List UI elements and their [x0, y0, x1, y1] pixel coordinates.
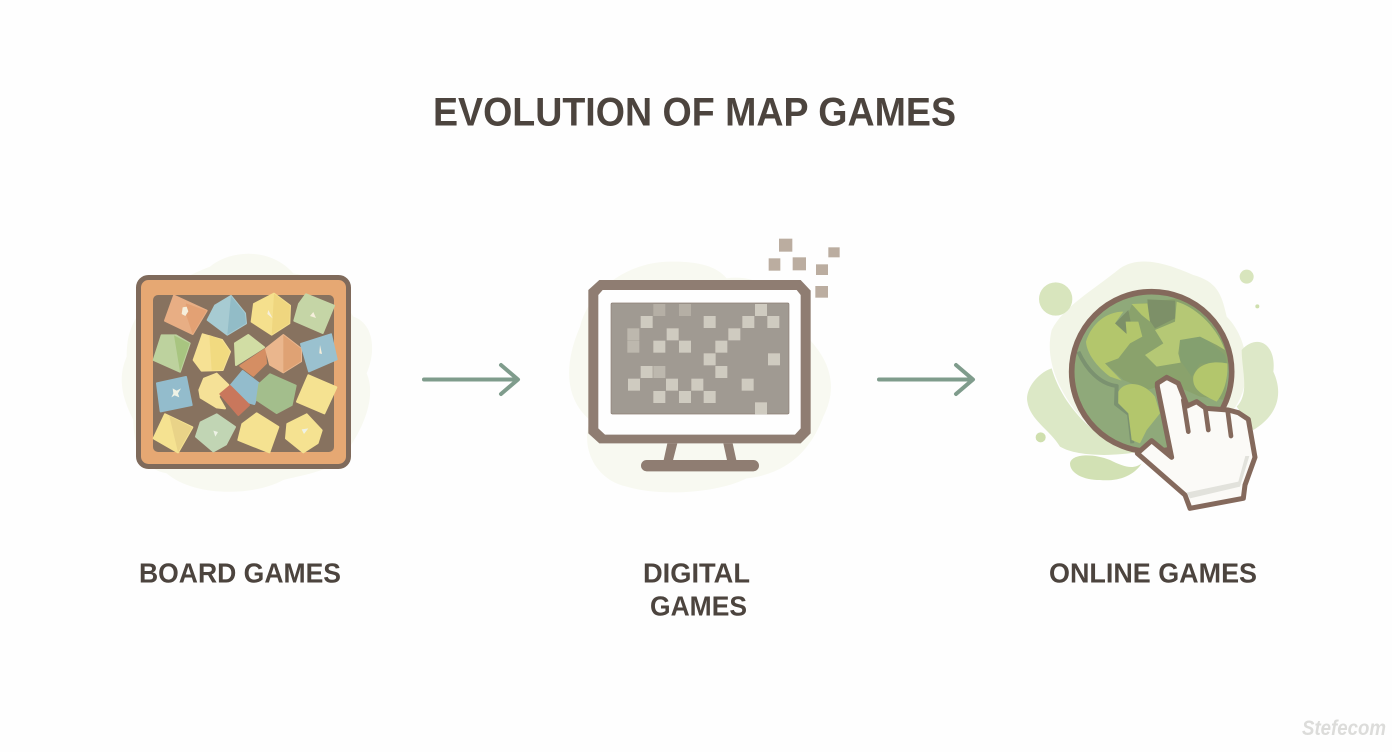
- africa: [1193, 362, 1227, 402]
- arrow: digital to online: [879, 365, 973, 394]
- label: digital games: [643, 558, 750, 622]
- monitor bezel: [598, 290, 801, 435]
- screen pixels: [627, 304, 780, 414]
- icon: online globe with hand: [1027, 262, 1278, 508]
- icon: digital monitor: [569, 239, 840, 492]
- greenland: [1132, 303, 1150, 322]
- tile marks: [182, 307, 322, 354]
- floating pixels: [769, 239, 840, 298]
- coast shadow: [1078, 352, 1132, 443]
- label: digital games: DIGITAL: [643, 558, 750, 588]
- monitor frame: [588, 280, 811, 443]
- ocean: [1072, 292, 1232, 452]
- board frame: [138, 278, 348, 466]
- title: EVOLUTION OF MAP GAMES: [433, 90, 956, 134]
- monitor stand: [641, 443, 759, 471]
- arrow: board to digital: [424, 365, 518, 394]
- eurasia: [1145, 302, 1225, 367]
- mid-tone land: [1105, 298, 1228, 400]
- top row tiles: [154, 294, 337, 376]
- globe: [1072, 292, 1232, 452]
- north america: [1086, 312, 1142, 381]
- dark north: [1147, 299, 1175, 328]
- screen: [611, 303, 789, 414]
- globe background blobs: [1027, 262, 1278, 480]
- icon: board game: [122, 254, 372, 492]
- south america: [1118, 384, 1160, 443]
- board background blob: [122, 254, 372, 492]
- tile marks: [171, 388, 308, 437]
- pointing hand: [1137, 377, 1255, 508]
- label: board games: BOARD GAMES: [139, 558, 341, 588]
- board field: [153, 295, 334, 452]
- bottom row tiles: [154, 371, 336, 452]
- monitor background blob: [569, 262, 831, 492]
- label: digital games: GAMES: [650, 590, 747, 622]
- label: online games: ONLINE GAMES: [1049, 558, 1257, 588]
- globe outline: [1072, 292, 1232, 452]
